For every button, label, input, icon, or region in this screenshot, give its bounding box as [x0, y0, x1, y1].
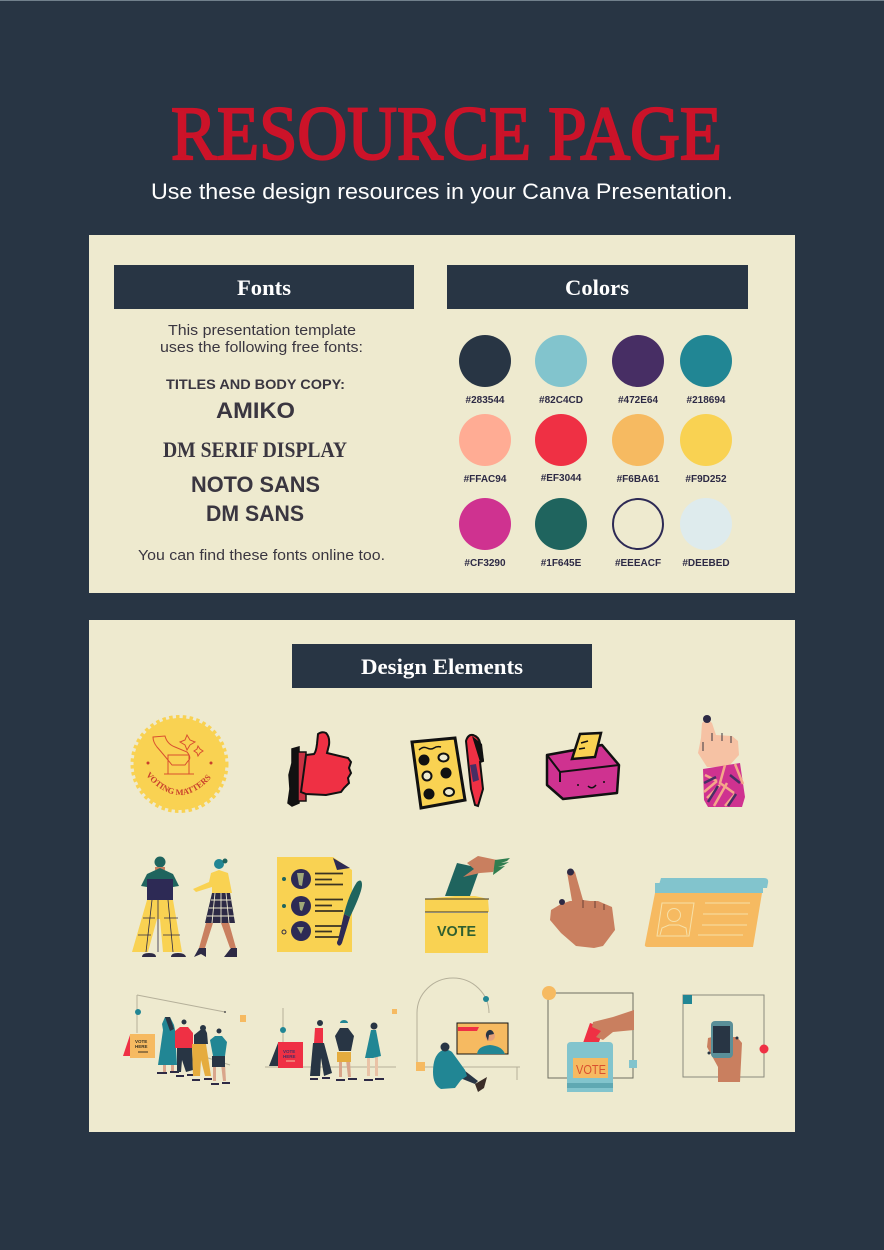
color swatches: #EEEACF [615, 558, 661, 569]
icon: hand dropping ballot in VOTE box: VOTE [437, 924, 476, 940]
icon: ID card [645, 878, 768, 947]
color swatches [459, 335, 732, 569]
icon: candidate checklist and pen [277, 857, 362, 952]
panel: design elements [89, 620, 795, 1132]
heading: design elements [292, 644, 592, 688]
color swatches: #82C4CD [539, 395, 583, 406]
icon: brown hand with inked finger [550, 868, 615, 948]
icon: thumbs up [288, 732, 351, 806]
illustration: queue at red vote sign: HERE [283, 1054, 296, 1059]
icon: hand dropping ballot in VOTE box [425, 856, 510, 953]
color swatches: #FFAC94 [464, 474, 507, 485]
heading: fonts: Fonts [237, 275, 291, 300]
illustration: queue at orange vote sign: VOTE [135, 1039, 147, 1044]
illustration: queue at red vote sign: VOTE [283, 1049, 295, 1054]
color swatches: #472E64 [618, 395, 658, 406]
illustration: hand and blue vote box [542, 986, 637, 1092]
icon: magenta ballot box [547, 733, 619, 799]
fonts text block [138, 322, 385, 564]
fonts text block: This presentation template [168, 322, 356, 339]
subtitle: Use these design resources in your Canva Presentation. [151, 179, 733, 204]
illustration: person watching a screen [416, 978, 520, 1092]
heading: colors [447, 265, 748, 309]
illustration: hand and blue vote box: VOTE [576, 1062, 606, 1077]
heading: fonts [114, 265, 414, 309]
icon: two people talking [132, 856, 237, 957]
color swatches: #CF3290 [464, 558, 506, 569]
color swatches: #F6BA61 [617, 474, 660, 485]
heading: design elements: Design Elements [361, 654, 523, 679]
illustration: hand holding phone [683, 995, 768, 1082]
fonts text block: AMIKO [216, 398, 295, 423]
fonts text block: You can find these fonts online too. [138, 547, 385, 564]
illustration: queue at orange vote sign: HERE [135, 1044, 148, 1049]
icon: voting matters badge: VOTING MATTERS [148, 772, 210, 796]
title: RESOURCE PAGE [171, 92, 722, 176]
color swatches: #DEEBED [682, 558, 730, 569]
icon: voting matters badge [130, 715, 228, 813]
illustration: queue at orange vote sign [123, 995, 246, 1085]
color swatches: #218694 [687, 395, 726, 406]
color swatches: #F9D252 [685, 474, 727, 485]
panel: fonts and colors [89, 235, 795, 593]
illustration: queue at red vote sign [265, 1008, 397, 1081]
icon: ballot and pen [412, 735, 484, 808]
fonts text block: DM SERIF DISPLAY [163, 437, 347, 462]
heading: colors: Colors [565, 275, 629, 300]
fonts text block: NOTO SANS [191, 472, 320, 497]
color swatches: #1F645E [541, 558, 582, 569]
fonts text block: DM SANS [206, 501, 304, 526]
fonts text block: TITLES AND BODY COPY: [166, 376, 345, 392]
color swatches: #EF3044 [541, 473, 582, 484]
icon: inked finger with patterned sleeve [698, 715, 745, 807]
fonts text block: uses the following free fonts: [160, 339, 363, 356]
color swatches: #283544 [466, 395, 505, 406]
